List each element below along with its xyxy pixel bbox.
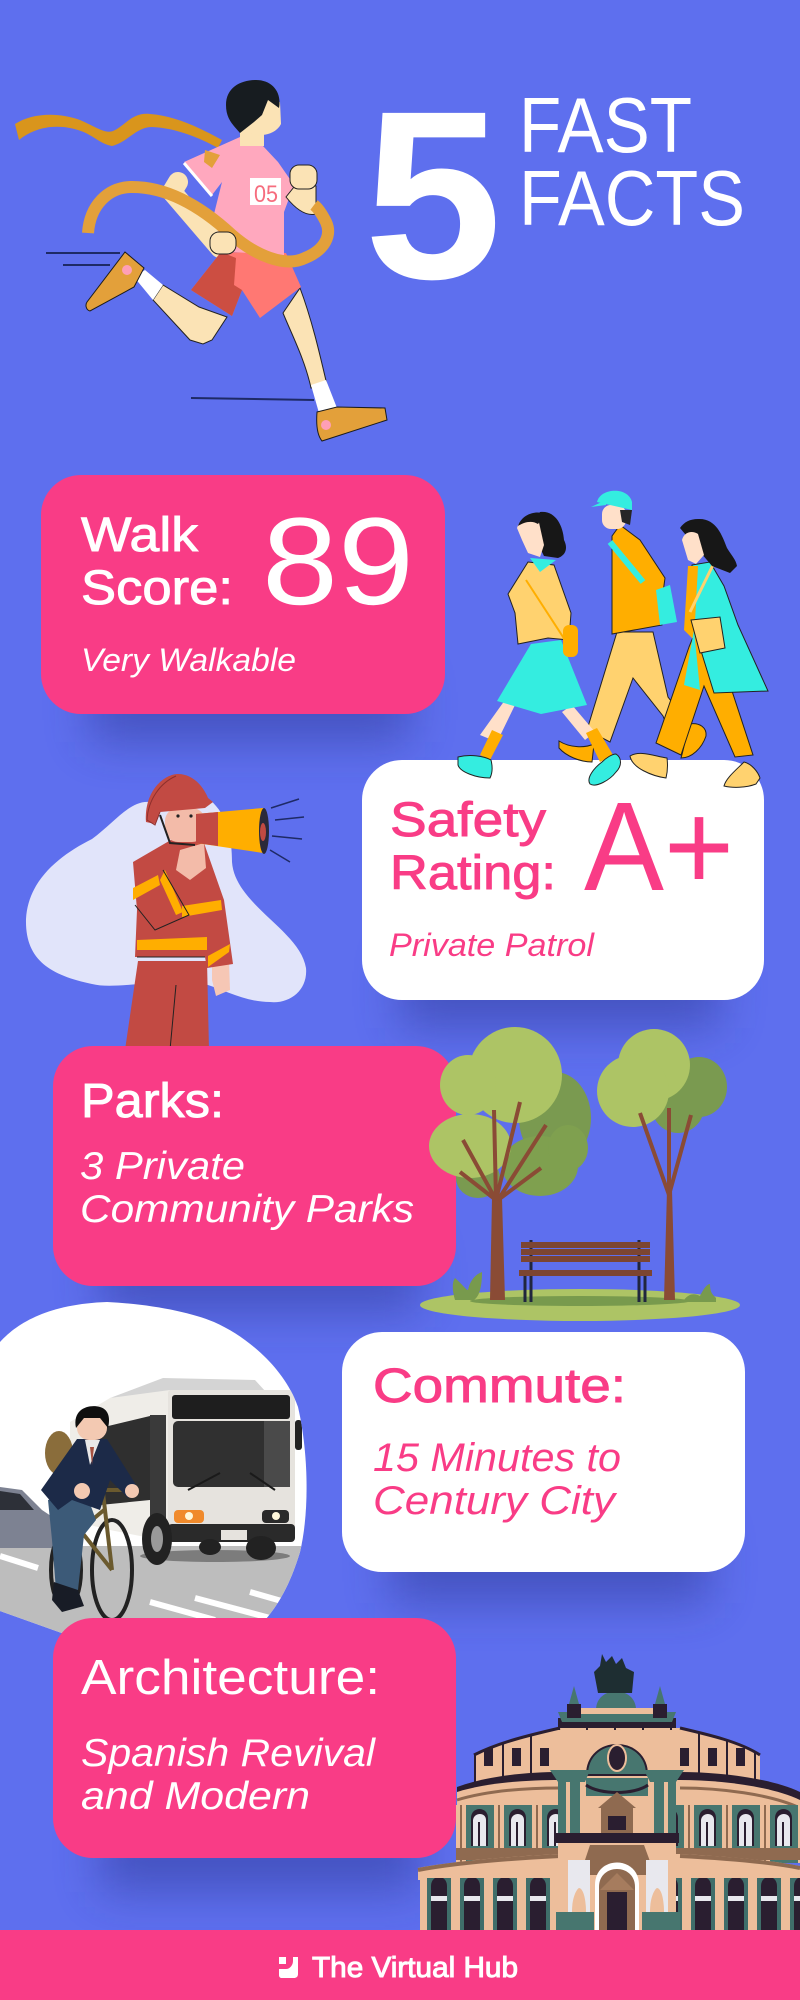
white blob [0, 1302, 307, 1640]
heading: walk score: Score: [81, 562, 233, 615]
panel: architecture [53, 1618, 456, 1858]
blob [26, 800, 306, 1002]
logo icon [279, 1957, 298, 1978]
panel: commute [342, 1332, 745, 1572]
text: 3 private community parks: Community Parks [80, 1188, 414, 1231]
bus [70, 1378, 302, 1565]
megaphone [196, 808, 263, 853]
text: 3 private community parks: 3 Private [80, 1145, 245, 1188]
title: 5 fast facts: FACTS [519, 154, 745, 242]
text: very walkable: Very Walkable [81, 642, 296, 678]
card shadows [90, 670, 720, 1892]
car [0, 1487, 58, 1548]
text: 15 minutes to century city: Century City [373, 1479, 618, 1523]
illustration: three people walking [458, 491, 768, 787]
footer bar [0, 1930, 800, 2000]
panel: parks [53, 1046, 456, 1286]
heading: safety rating: Rating: [390, 847, 556, 900]
illustration: opera house [418, 1654, 800, 1930]
heading: walk score: Walk [81, 509, 199, 562]
cyclist [41, 1406, 139, 1620]
lower tier [420, 1878, 800, 1930]
heading: safety rating [390, 794, 556, 900]
value: 89: 89 [262, 493, 414, 631]
heading: walk score [81, 509, 233, 615]
illustration: cyclist and bus in white blob [0, 1302, 310, 1646]
panel: walk score [41, 475, 445, 714]
illustration: park trees and bench [420, 1027, 740, 1321]
value: A+: A+ [584, 776, 734, 917]
title: 5 fast facts [364, 61, 745, 329]
illustration: runner with finish ribbon: 05 [254, 181, 278, 208]
heading: commute: Commute: [373, 1360, 626, 1413]
middle tier [456, 1805, 800, 1863]
illustration: runner with finish ribbon [15, 80, 387, 441]
upper drum [474, 1728, 760, 1785]
illustration: firefighter with megaphone [26, 774, 306, 1050]
text: 15 minutes to century city: 15 Minutes to [373, 1436, 621, 1480]
text: spanish revival and modern [81, 1732, 376, 1818]
text: spanish revival and modern: Spanish Revival [81, 1732, 376, 1775]
title: 5 fast facts: FAST [519, 81, 692, 169]
lower band [418, 1854, 800, 1880]
firefighter body [125, 774, 304, 1050]
text: 3 private community parks [80, 1145, 414, 1231]
heading: safety rating: Safety [390, 794, 546, 847]
text: spanish revival and modern: and Modern [81, 1775, 310, 1818]
panel: safety rating [362, 760, 764, 1000]
heading: architecture: Architecture: [81, 1651, 380, 1705]
text: private patrol: Private Patrol [389, 927, 595, 963]
road [0, 1546, 302, 1633]
text: 15 minutes to century city [373, 1436, 621, 1523]
brand name: The Virtual Hub [312, 1952, 518, 1984]
heading: parks: Parks: [81, 1075, 224, 1128]
central pavilion [550, 1712, 684, 1930]
dome and statue [567, 1654, 667, 1718]
title: 5 fast facts: 5 [364, 61, 502, 329]
